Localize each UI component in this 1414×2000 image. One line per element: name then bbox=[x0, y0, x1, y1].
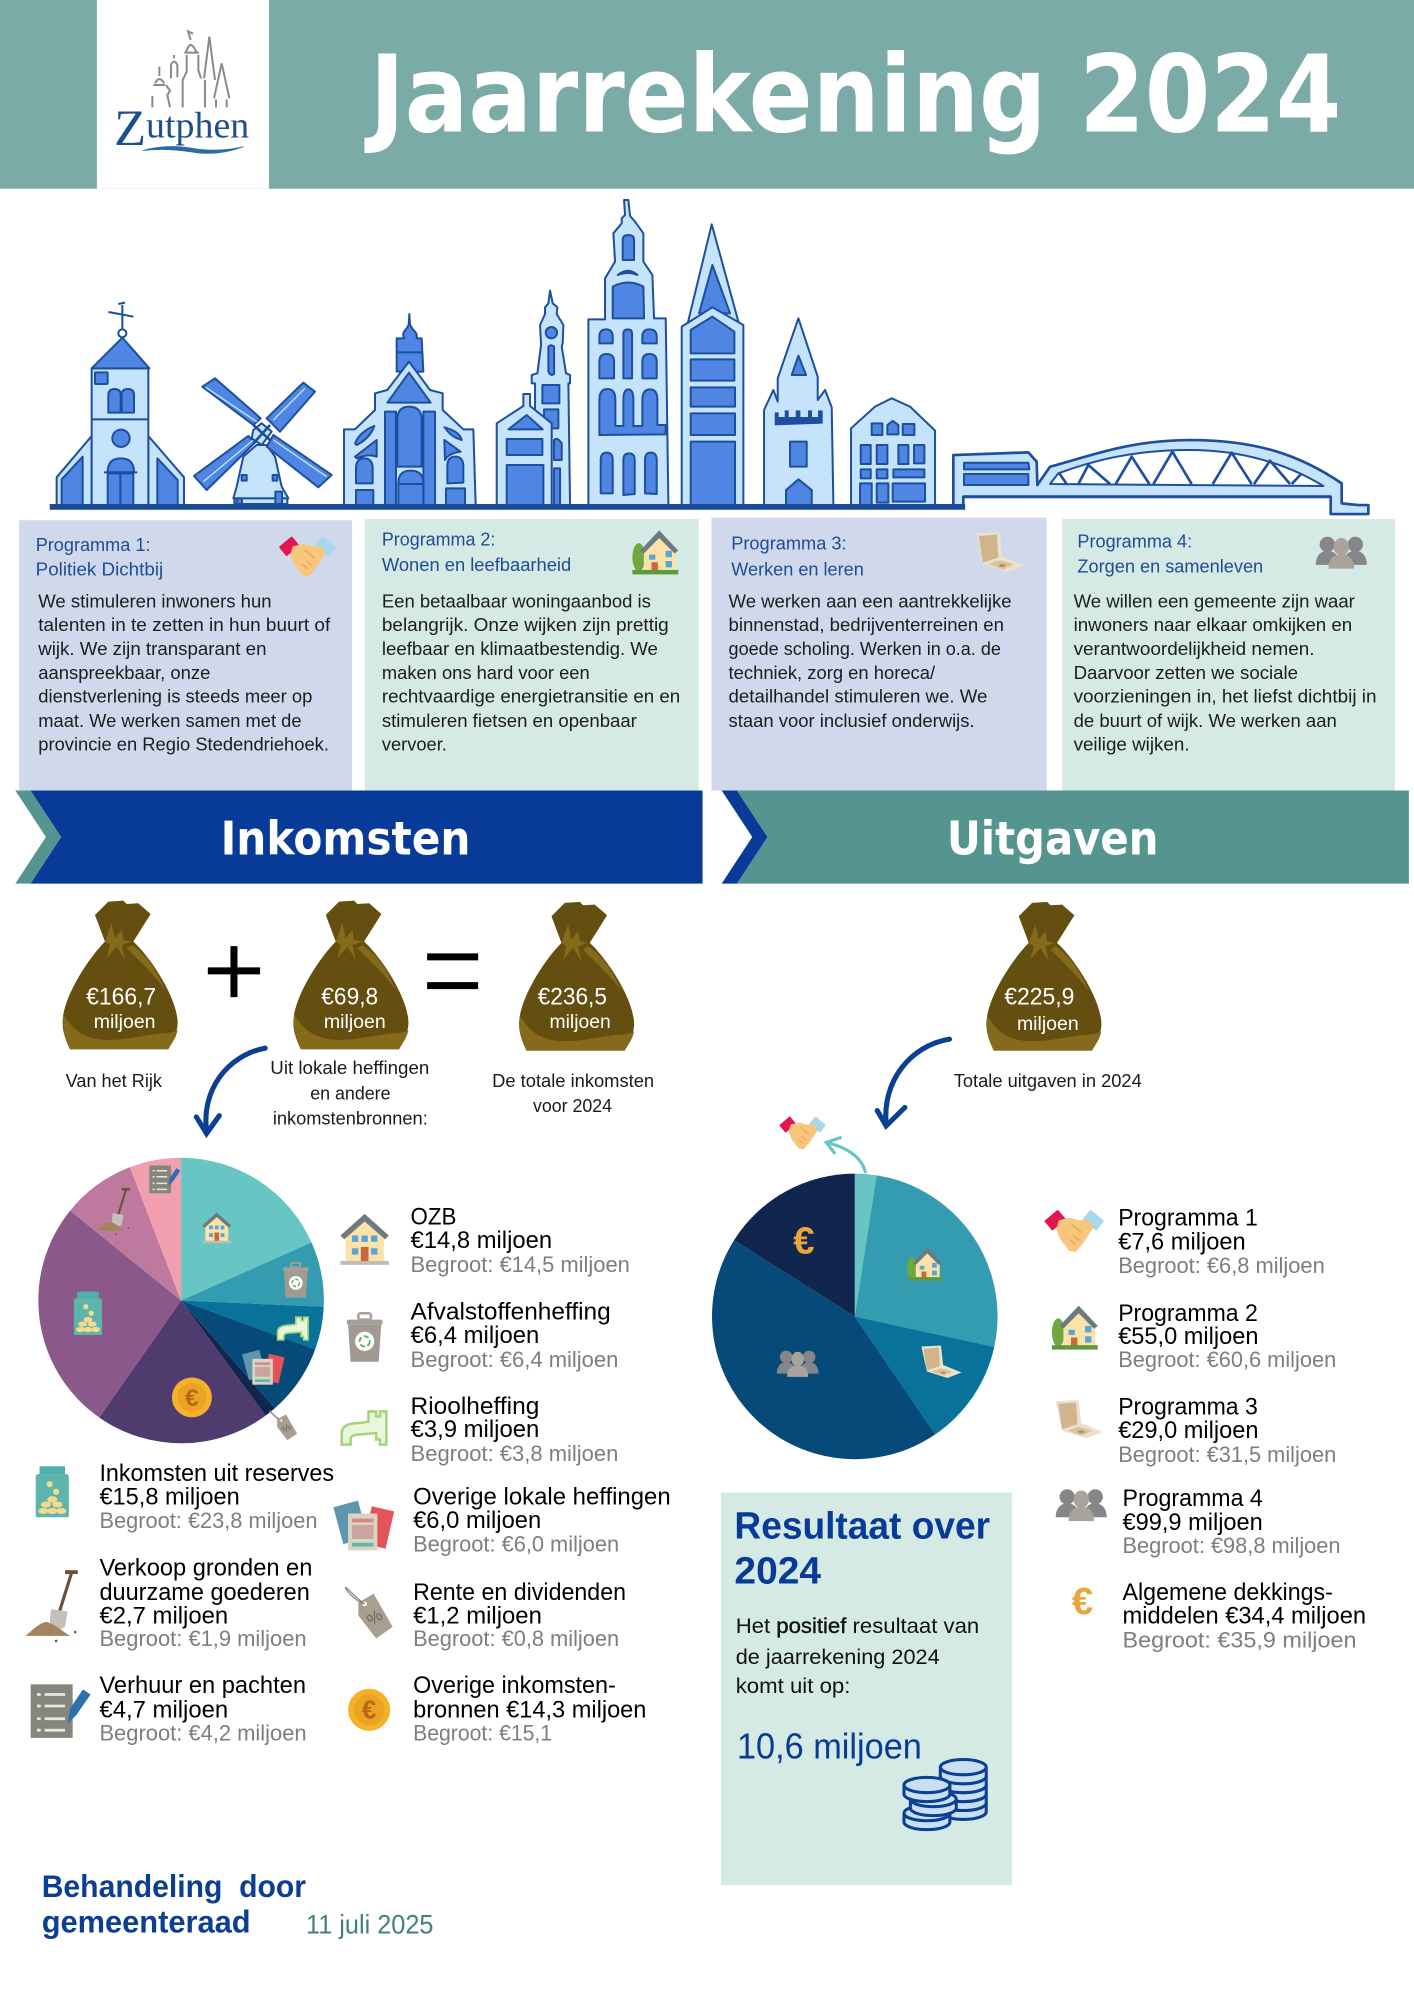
legend item: Afvalstoffenheffing: €6,4 miljoen bbox=[411, 1322, 539, 1348]
icon: handshake above pie bbox=[779, 1116, 826, 1149]
legend item: Verkoop gronden: Begroot: €1,9 miljoen bbox=[99, 1626, 307, 1651]
panel: programma 1: Politiek Dichtbij bbox=[36, 559, 163, 580]
legend item: Overige inkomstenbronnen: Overige inkomsten- bbox=[413, 1672, 616, 1698]
legend item: Algemene dekkingsmiddelen: Algemene dekkings- bbox=[1123, 1579, 1333, 1605]
text programma 3: staan voor inclusief onderwijs. bbox=[729, 710, 975, 731]
clock tower with house bbox=[497, 291, 570, 505]
text programma 1: maat. We werken samen met de bbox=[38, 710, 302, 731]
icon: handshake bbox=[279, 536, 336, 577]
ground line bbox=[50, 505, 965, 509]
pie chart: income bbox=[38, 1158, 324, 1443]
legend item: Rente en dividenden: Begroot: €0,8 miljoen bbox=[413, 1626, 619, 1651]
bridge bbox=[953, 440, 1368, 514]
panel: resultaat bbox=[721, 1493, 1012, 1885]
gothic church bbox=[344, 314, 476, 505]
legend item: Algemene dekkingsmiddelen: middelen €34,4 miljoen bbox=[1123, 1603, 1366, 1629]
legend item: Overige inkomstenbronnen bbox=[348, 1672, 646, 1745]
text programma 3: goede scholing. Werken in o.a. de bbox=[729, 638, 1001, 659]
money bag: 225,9: miljoen bbox=[1017, 1013, 1079, 1035]
label: totale inkomsten: voor 2024 bbox=[533, 1095, 612, 1116]
legend item: OZB: OZB bbox=[411, 1204, 456, 1230]
legend item: Verkoop gronden bbox=[26, 1554, 312, 1651]
text: resultaat: komt uit op: bbox=[736, 1673, 850, 1698]
legend item: Programma 3: Begroot: €31,5 miljoen bbox=[1118, 1442, 1336, 1467]
legend item: Programma 3: Programma 3 bbox=[1118, 1394, 1258, 1420]
legend item: Algemene dekkingsmiddelen: Begroot: €35,9 miljoen bbox=[1123, 1627, 1356, 1652]
money bag: 225,9: €225,9 bbox=[1004, 983, 1074, 1010]
legend item: Programma 2 bbox=[1052, 1300, 1336, 1372]
footer: date: 11 juli 2025 bbox=[306, 1909, 434, 1939]
money bag: 69,8 bbox=[293, 901, 408, 1049]
legend item: Programma 1: Programma 1 bbox=[1118, 1205, 1258, 1231]
spire tower bbox=[682, 224, 743, 505]
panel: programma 3: Werken en leren bbox=[731, 559, 864, 580]
label: totale uitgaven: Totale uitgaven in 2024 bbox=[954, 1070, 1142, 1091]
text programma 3 bbox=[729, 591, 1012, 731]
legend item: Algemene dekkingsmiddelen bbox=[1072, 1579, 1366, 1652]
logo: Zutphen: Z bbox=[114, 101, 146, 157]
legend item: Rioolheffing: €3,9 miljoen bbox=[411, 1416, 539, 1442]
text programma 4: We willen een gemeente zijn waar bbox=[1074, 591, 1355, 612]
legend item: Verhuur en pachten bbox=[31, 1672, 307, 1745]
heading programma 3: Programma 3: bbox=[731, 533, 847, 554]
label: lokale heffingen: inkomstenbronnen: bbox=[273, 1108, 428, 1129]
panel: programma 4 bbox=[1062, 519, 1395, 791]
footer: behandeling: gemeenteraad bbox=[42, 1904, 251, 1940]
icon: laptop bbox=[976, 532, 1024, 572]
panel: programma 3 bbox=[711, 518, 1047, 791]
text programma 1: dienstverlening is steeds meer op bbox=[38, 686, 312, 707]
legend item: Programma 4: €99,9 miljoen bbox=[1123, 1509, 1263, 1535]
legend item: Verkoop gronden: duurzame goederen bbox=[99, 1579, 310, 1605]
legend item: Overige lokale heffingen: Overige lokale heffingen bbox=[413, 1484, 671, 1510]
money bag: 166,7 bbox=[63, 901, 178, 1049]
legend item: Programma 3: €29,0 miljoen bbox=[1118, 1417, 1258, 1443]
heading programma 4: Programma 4: bbox=[1077, 530, 1192, 551]
text programma 4: voorzieningen in, het liefst dichtbij in bbox=[1074, 686, 1377, 707]
banner: Uitgaven bbox=[722, 791, 1409, 884]
label: van het rijk: Van het Rijk bbox=[66, 1070, 163, 1091]
arrow: teal to handshake bbox=[826, 1137, 866, 1173]
legend item: Programma 4 bbox=[1056, 1485, 1341, 1558]
text programma 3: techniek, zorg en horeca/ bbox=[729, 662, 936, 683]
pie chart: expenses: € bbox=[793, 1219, 815, 1262]
legend item: Verkoop gronden: €2,7 miljoen bbox=[99, 1603, 228, 1629]
banner: Inkomsten: Inkomsten bbox=[221, 811, 470, 865]
legend item: Verkoop gronden: Verkoop gronden en bbox=[99, 1554, 312, 1580]
text programma 4: verantwoordelijkheid nemen. bbox=[1074, 638, 1315, 659]
legend item: Programma 1: Begroot: €6,8 miljoen bbox=[1118, 1253, 1325, 1278]
legend item: Verhuur en pachten: Verhuur en pachten bbox=[99, 1672, 306, 1698]
legend item: Programma 2: Begroot: €60,6 miljoen bbox=[1118, 1347, 1336, 1372]
crenellated tower bbox=[764, 318, 833, 505]
legend item: Rioolheffing: Rioolheffing bbox=[411, 1393, 539, 1419]
legend item: Rente en dividenden bbox=[345, 1579, 626, 1651]
money bag: 69,8: miljoen bbox=[324, 1011, 386, 1033]
legend item: Verhuur en pachten: €4,7 miljoen bbox=[99, 1696, 228, 1722]
text programma 1: wijk. We zijn transparant en bbox=[37, 638, 266, 659]
money bag: 236,5 bbox=[519, 902, 634, 1051]
heading programma 1: Programma 1: bbox=[36, 534, 150, 555]
icon: house with tree bbox=[632, 530, 678, 574]
text programma 1: talenten in te zetten in hun buurt of bbox=[38, 614, 331, 635]
icon: people bbox=[1316, 537, 1367, 569]
legend item: Afvalstoffenheffing: Begroot: €6,4 miljoen bbox=[411, 1347, 618, 1372]
label: lokale heffingen: en andere bbox=[310, 1083, 391, 1104]
text programma 2: vervoer. bbox=[382, 734, 447, 755]
legend item: Programma 1 bbox=[1044, 1205, 1325, 1278]
legend item: Programma 2: €55,0 miljoen bbox=[1118, 1323, 1258, 1349]
arrow: to expense pie bbox=[877, 1039, 950, 1126]
banner: Uitgaven: Uitgaven bbox=[947, 811, 1158, 865]
money bag: 166,7: €166,7 bbox=[86, 983, 156, 1010]
text programma 3: binnenstad, bedrijventerreinen en bbox=[729, 614, 1004, 635]
text programma 2: belangrijk. Onze wijken zijn prettig bbox=[382, 614, 669, 635]
icon: coin stacks bbox=[904, 1760, 986, 1830]
logo: Zutphen: utphen bbox=[146, 105, 249, 146]
plus sign bbox=[208, 946, 260, 997]
money bag: 225,9 bbox=[986, 902, 1101, 1051]
windmill bbox=[194, 378, 332, 504]
money bag: 166,7: miljoen bbox=[94, 1011, 156, 1033]
text programma 4 bbox=[1074, 591, 1377, 755]
legend item: Algemene dekkingsmiddelen: € bbox=[1072, 1580, 1093, 1623]
legend item: Programma 4: Begroot: €98,8 miljoen bbox=[1123, 1533, 1341, 1558]
text programma 4: de buurt of wijk. We werken aan bbox=[1074, 710, 1337, 731]
label: totale inkomsten bbox=[492, 1070, 654, 1116]
legend item: Inkomsten uit reserves bbox=[36, 1460, 334, 1533]
legend item: OZB: Begroot: €14,5 miljoen bbox=[411, 1252, 630, 1277]
label: lokale heffingen bbox=[270, 1057, 429, 1129]
header band bbox=[0, 0, 1414, 189]
legend item: Overige lokale heffingen: €6,0 miljoen bbox=[413, 1507, 541, 1533]
text programma 2: rechtvaardige energietransitie en en bbox=[382, 686, 680, 707]
legend item: Rioolheffing: Begroot: €3,8 miljoen bbox=[411, 1441, 618, 1466]
heading: resultaat bbox=[734, 1504, 990, 1592]
heading: resultaat: Resultaat over bbox=[734, 1504, 990, 1547]
legend item: Verhuur en pachten: Begroot: €4,2 miljoen bbox=[99, 1720, 307, 1745]
legend item: Overige inkomstenbronnen: Begroot: €15,1 bbox=[413, 1720, 552, 1745]
panel: programma 4: Zorgen en samenleven bbox=[1077, 555, 1263, 576]
banner: Inkomsten bbox=[15, 791, 703, 884]
text programma 2 bbox=[382, 591, 680, 755]
gabled house bbox=[851, 398, 935, 505]
text programma 3: detailhandel stimuleren we. We bbox=[729, 686, 987, 707]
result value: 10,6 miljoen bbox=[737, 1726, 922, 1766]
text programma 2: Een betaalbaar woningaanbod is bbox=[382, 591, 651, 612]
legend item: Rente en dividenden: €1,2 miljoen bbox=[413, 1603, 542, 1629]
text programma 3: We werken aan een aantrekkelijke bbox=[729, 591, 1012, 612]
legend item: Rioolheffing bbox=[342, 1393, 618, 1466]
legend item: Afvalstoffenheffing bbox=[347, 1298, 618, 1372]
heading: resultaat: 2024 bbox=[734, 1549, 822, 1592]
text: resultaat: Het positief resultaat van bbox=[736, 1613, 979, 1638]
money bag: 236,5: miljoen bbox=[550, 1011, 611, 1033]
label: lokale heffingen: Uit lokale heffingen bbox=[270, 1057, 429, 1078]
legend item: Inkomsten uit reserves: Begroot: €23,8 miljoen bbox=[99, 1508, 317, 1533]
text programma 4: inwoners naar elkaar omkijken en bbox=[1074, 614, 1352, 635]
legend item: Inkomsten uit reserves: €15,8 miljoen bbox=[99, 1484, 240, 1510]
legend item: Overige lokale heffingen bbox=[333, 1484, 671, 1557]
heading programma 2: Programma 2: bbox=[382, 529, 495, 550]
panel: programma 2 bbox=[365, 519, 699, 791]
text: resultaat bbox=[736, 1613, 979, 1698]
panel: programma 2: Wonen en leefbaarheid bbox=[382, 554, 571, 575]
arrow: to income pie bbox=[196, 1048, 265, 1133]
text programma 2: stimuleren fietsen en openbaar bbox=[382, 710, 637, 731]
text programma 1 bbox=[37, 591, 331, 755]
legend item: Inkomsten uit reserves: Inkomsten uit reserves bbox=[99, 1460, 334, 1486]
label: totale inkomsten: De totale inkomsten bbox=[492, 1070, 654, 1091]
legend item: Afvalstoffenheffing: Afvalstoffenheffing bbox=[411, 1298, 611, 1324]
legend item: Programma 1: €7,6 miljoen bbox=[1118, 1229, 1246, 1255]
money bag: 236,5: €236,5 bbox=[538, 983, 607, 1010]
main tower bbox=[588, 200, 668, 505]
legend item: Programma 4: Programma 4 bbox=[1123, 1485, 1263, 1511]
text programma 1: provincie en Regio Stedendriehoek. bbox=[38, 734, 329, 755]
legend item: OZB bbox=[340, 1204, 630, 1277]
text programma 1: We stimuleren inwoners hun bbox=[38, 591, 272, 612]
footer: behandeling bbox=[42, 1868, 306, 1940]
legend item: Overige inkomstenbronnen: bronnen €14,3 miljoen bbox=[413, 1696, 646, 1722]
pie chart: expenses bbox=[712, 1174, 998, 1459]
legend item: Programma 2: Programma 2 bbox=[1118, 1300, 1258, 1326]
text programma 4: Daarvoor zetten we sociale bbox=[1074, 662, 1298, 683]
equals sign bbox=[427, 957, 478, 986]
legend item: Overige lokale heffingen: Begroot: €6,0 miljoen bbox=[413, 1532, 619, 1557]
logo: Zutphen bbox=[97, 0, 269, 189]
money bag: 69,8: €69,8 bbox=[321, 983, 378, 1010]
skyline illustration bbox=[50, 200, 1368, 514]
text programma 2: maken ons hard voor een bbox=[382, 662, 590, 683]
panel: programma 1 bbox=[19, 520, 352, 791]
text programma 4: veilige wijken. bbox=[1074, 734, 1190, 755]
church with cross bbox=[57, 303, 184, 505]
legend item: Programma 3 bbox=[1056, 1394, 1336, 1467]
legend item: Rente en dividenden: Rente en dividenden bbox=[413, 1579, 626, 1605]
legend item: OZB: €14,8 miljoen bbox=[411, 1227, 552, 1253]
text: resultaat: de jaarrekening 2024 bbox=[736, 1644, 940, 1669]
text programma 1: aanspreekbaar, onze bbox=[38, 662, 210, 683]
footer: behandeling: Behandeling door bbox=[42, 1868, 306, 1904]
text programma 2: leefbaar en klimaatbestendig. We bbox=[382, 638, 658, 659]
